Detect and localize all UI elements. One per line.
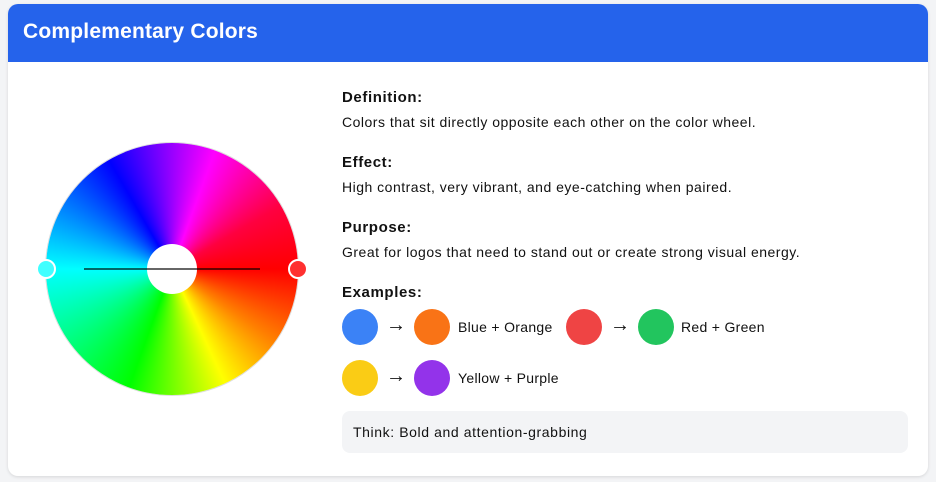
definition: Definition: <box>342 89 423 106</box>
think callout: Think: Bold and attention-grabbing <box>353 424 587 440</box>
example: yellow purple <box>342 360 559 396</box>
example: blue orange <box>342 309 553 345</box>
header: Complementary Colors <box>23 20 258 43</box>
example: yellow purple: → <box>386 365 406 387</box>
examples heading: Examples: <box>342 284 422 301</box>
effect: Effect: <box>342 154 393 171</box>
purpose <box>342 219 800 260</box>
center hole <box>147 244 197 294</box>
example: blue orange: Blue + Orange <box>458 319 553 335</box>
example: yellow purple: Yellow + Purple <box>458 370 559 386</box>
effect <box>342 154 732 195</box>
example: red green: Red + Green <box>681 319 765 335</box>
definition: Colors that sit directly opposite each other on the color wheel. <box>342 114 756 130</box>
marker red <box>288 259 308 279</box>
marker cyan <box>36 259 56 279</box>
connector line <box>84 268 260 270</box>
purpose: Purpose: <box>342 219 412 236</box>
color wheel <box>46 143 298 395</box>
example: red green: → <box>610 314 630 336</box>
example: red green <box>566 309 765 345</box>
example: blue orange: → <box>386 314 406 336</box>
definition <box>342 89 756 130</box>
effect: High contrast, very vibrant, and eye-catching when paired. <box>342 179 732 195</box>
think callout <box>342 411 908 453</box>
header <box>8 4 928 62</box>
purpose: Great for logos that need to stand out or create strong visual energy. <box>342 244 800 260</box>
